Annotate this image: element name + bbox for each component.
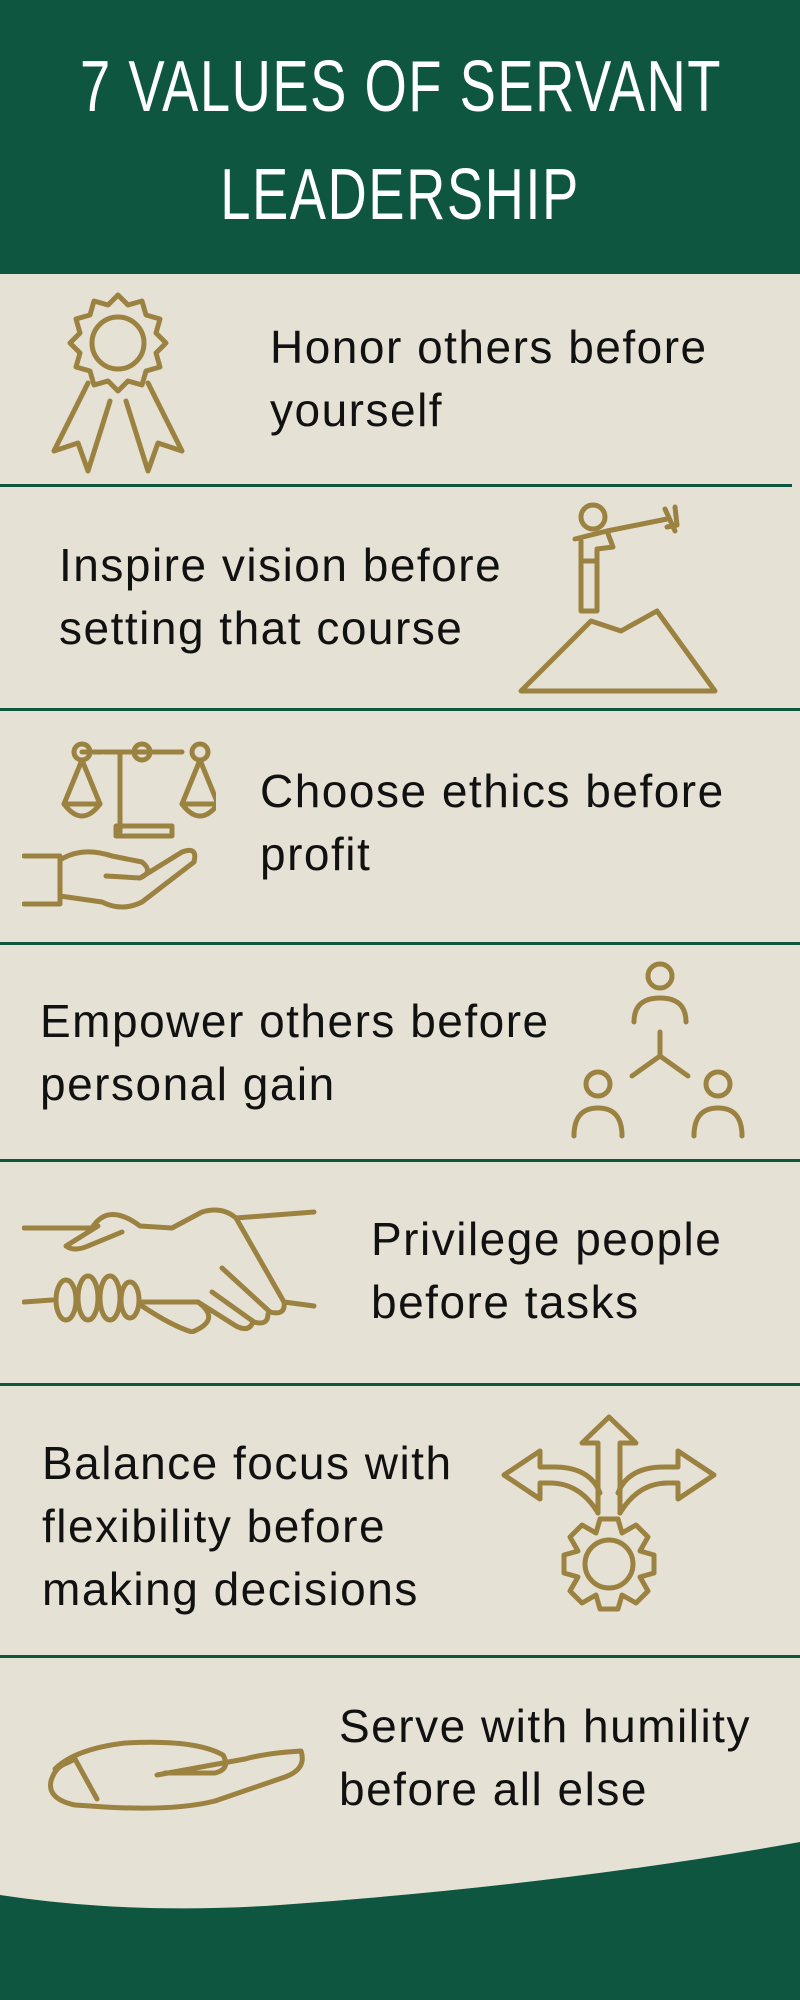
icon: handshake <box>22 1208 316 1334</box>
text: inspire: Inspire vision before <box>59 539 502 591</box>
icon: arrows and gear <box>502 1414 716 1612</box>
text: privilege: before tasks <box>371 1276 640 1328</box>
text: choose: profit <box>260 828 371 880</box>
text: empower: Empower others before <box>40 995 550 1047</box>
text: honor: yourself <box>270 384 443 436</box>
text: serve: before all else <box>339 1763 648 1815</box>
icon: person with telescope on mountain <box>518 502 718 694</box>
text: balance: Balance focus with <box>42 1437 453 1489</box>
text: empower <box>40 995 550 1110</box>
text: balance <box>42 1437 453 1615</box>
icon: open hand <box>48 1740 305 1811</box>
text: serve <box>339 1700 751 1815</box>
icon: team structure <box>572 962 744 1138</box>
text: choose <box>260 765 725 880</box>
title: 7 VALUES OF SERVANT <box>80 47 722 127</box>
text: inspire <box>59 539 502 654</box>
title <box>80 47 722 235</box>
header <box>0 0 800 274</box>
footer wave <box>0 1842 800 2000</box>
text: balance: flexibility before <box>42 1500 386 1552</box>
text: privilege <box>371 1213 722 1328</box>
text: privilege: Privilege people <box>371 1213 722 1265</box>
icon: rosette <box>52 292 184 474</box>
text: empower: personal gain <box>40 1058 336 1110</box>
text: choose: Choose ethics before <box>260 765 725 817</box>
icon: scales with hand <box>22 742 216 910</box>
text: honor <box>270 321 708 436</box>
title: LEADERSHIP <box>220 155 580 235</box>
text: balance: making decisions <box>42 1563 419 1615</box>
text: serve: Serve with humility <box>339 1700 751 1752</box>
text: honor: Honor others before <box>270 321 708 373</box>
text: inspire: setting that course <box>59 602 463 654</box>
